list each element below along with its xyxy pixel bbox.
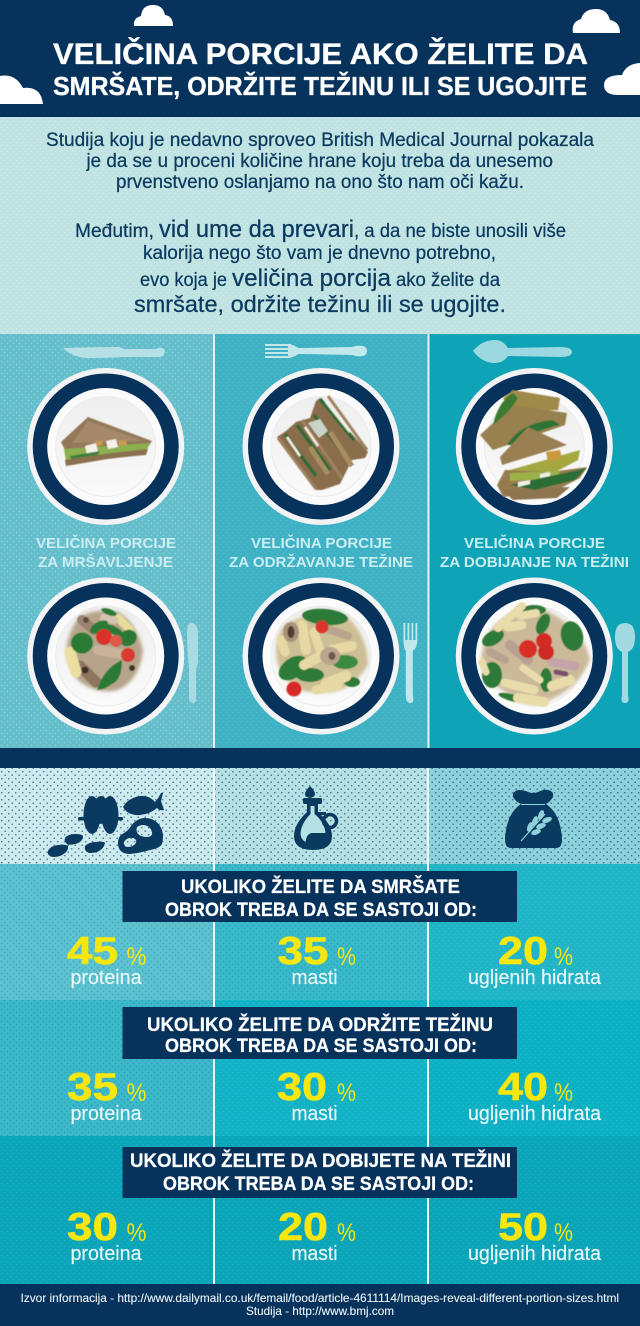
stats: maintain weight: % [337,1079,356,1107]
intro paragraph 1 [46,130,594,193]
title: VELIČINA PORCIJE AKO ŽELITE DA [53,37,588,71]
intro paragraph 2: smršate, održite težinu ili se ugojite. [134,291,506,317]
intro paragraph 2: vid ume da prevari [159,216,354,243]
icon: fork bottom [404,623,417,703]
plate: small salad [27,578,184,734]
column captions [36,534,629,571]
stats: lose weight: masti [292,967,338,989]
stats: gain weight: masti [292,1243,338,1265]
icon: knife bottom [187,623,198,703]
intro paragraph 1: Studija koju je nedavno sproveo British Medical Journal pokazala [46,130,594,151]
icon: spoon bottom [615,623,635,703]
stats: lose weight: ugljenih hidrata [468,967,602,989]
stats: maintain weight: masti [292,1103,338,1125]
stats: gain weight: proteina [70,1243,142,1265]
intro paragraph 2: veličina porcija [232,265,392,292]
stats: lose weight: proteina [70,967,142,989]
intro paragraph 2: , a da ne biste unosili više [354,221,566,242]
caption 2: ZA ODRŽAVANJE TEŽINE [229,553,413,571]
caption 2: VELIČINA PORCIJE [251,534,392,552]
panel: maintain weight row [0,1000,640,1136]
stats: lose weight: 35 [278,930,328,973]
footer [0,1284,640,1326]
caption 3 [440,534,629,571]
panel: gain weight row [0,1136,640,1284]
plate: medium sandwich [242,368,400,525]
icon: knife top [63,347,165,358]
plate: medium salad [242,578,400,734]
stats: gain weight: ugljenih hidrata [468,1243,602,1265]
intro paragraph 2: evo koja je [140,270,227,291]
caption 3: VELIČINA PORCIJE [464,534,605,552]
panel: portion columns background [0,334,640,748]
panel: macronutrient icons [0,768,640,864]
header band [0,0,640,117]
icon: spoon top [473,340,572,363]
heading box: maintain weight [122,1007,517,1059]
panel: lose weight row [0,864,640,1000]
caption 3: ZA DOBIJANJE NA TEŽINI [440,553,629,571]
stats: maintain weight: 35 [67,1066,118,1109]
heading box: lose weight: OBROK TREBA DA SE SASTOJI OD: [165,899,477,921]
intro paragraph 1: je da se u proceni količine hrane koju treba da unesemo [86,151,553,172]
icon: protein foods [48,793,164,857]
intro paragraph 2: ako želite da [396,270,500,291]
plate: large sandwich [456,368,613,525]
stats: maintain weight: % [554,1079,573,1107]
intro paragraph 1: prvenstveno oslanjamo na ono što nam oči kažu. [116,172,524,193]
stats: gain weight: % [126,1219,146,1247]
stats: maintain weight: proteina [70,1103,142,1125]
heading box: maintain weight: OBROK TREBA DA SE SASTOJI OD: [165,1035,477,1057]
panel: intro [0,117,640,334]
icon: clouds [0,5,640,104]
caption 2 [229,534,413,571]
plate: large salad [456,578,613,734]
heading box: gain weight [122,1147,517,1198]
heading box: gain weight: OBROK TREBA DA SE SASTOJI OD: [163,1173,474,1195]
heading box: lose weight [122,871,517,922]
stats: gain weight: 30 [67,1206,118,1249]
stats: lose weight: % [554,943,573,971]
stats: lose weight: 45 [67,930,118,973]
stats: lose weight [67,930,602,989]
intro paragraph 2: Međutim, [75,221,154,242]
intro paragraph 2 [75,216,566,317]
caption 1: ZA MRŠAVLJENJE [38,553,173,571]
stats: maintain weight [67,1066,602,1125]
stats: lose weight: % [126,943,146,971]
caption 1: VELIČINA PORCIJE [36,534,176,552]
stats: maintain weight: 40 [498,1066,548,1109]
intro paragraph 2: kalorija nego što vam je dnevno potrebno, [143,243,496,264]
heading box: lose weight: UKOLIKO ŽELITE DA SMRŠATE [181,874,460,898]
plate: small sandwich [27,368,184,525]
stats: maintain weight: 30 [277,1066,327,1109]
heading box: maintain weight: UKOLIKO ŽELITE DA ODRŽITE TEŽINU [147,1012,493,1036]
stats: gain weight [67,1206,602,1265]
footer: Studija - http://www.bmj.com [246,1304,394,1318]
icon: grain sack [505,790,562,848]
navy band [0,748,640,768]
stats: gain weight: 50 [498,1206,548,1249]
stats: maintain weight: % [126,1079,146,1107]
title [53,37,588,101]
footer: Izvor informacija - http://www.dailymail.co.uk/femail/food/article-4611114/Images-reveal-different-portion-sizes.html [20,1291,619,1305]
heading box: gain weight: UKOLIKO ŽELITE DA DOBIJETE NA TEŽINI [130,1148,511,1172]
stats: gain weight: % [337,1219,356,1247]
stats: gain weight: 20 [278,1206,328,1249]
title: SMRŠATE, ODRŽITE TEŽINU ILI SE UGOJITE [53,71,587,101]
stats: lose weight: % [337,943,356,971]
icon: oil bottle [294,786,336,850]
caption 1 [36,534,176,571]
stats: maintain weight: ugljenih hidrata [468,1103,602,1125]
icon: fork top [265,344,367,358]
stats: lose weight: 20 [498,930,548,973]
stats: gain weight: % [554,1219,573,1247]
